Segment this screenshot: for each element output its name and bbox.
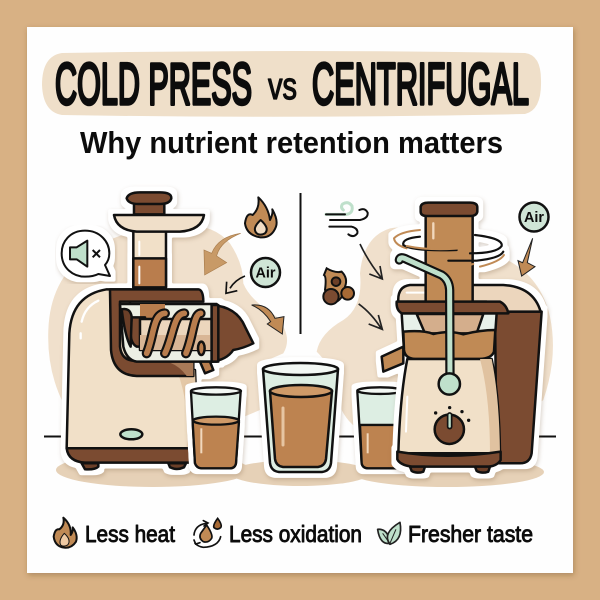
background blob: right [317, 228, 553, 433]
icon: fruit pieces [323, 268, 354, 304]
benefit: less oxidation: Less oxidation [229, 521, 362, 547]
collar [397, 302, 508, 313]
feed tube [426, 215, 473, 303]
outlet spout [200, 362, 213, 373]
speech bubble: quiet [62, 231, 110, 277]
motion swirl [394, 230, 504, 267]
icon: wind [326, 203, 368, 236]
thin arrows: right [359, 244, 382, 329]
dial [435, 415, 464, 444]
center divider [300, 193, 302, 334]
background blob: left [48, 225, 287, 437]
tube cap [421, 203, 477, 216]
cold press juicer [67, 192, 253, 469]
green lever [399, 258, 450, 377]
base [397, 452, 501, 467]
hood [398, 285, 541, 312]
icon: air badge right [520, 202, 548, 232]
icon: flame left [245, 197, 277, 237]
auger chamber [120, 304, 217, 362]
end cap [212, 305, 253, 362]
title banner: COLD PRESS [55, 52, 252, 117]
title banner: vs [268, 66, 297, 108]
icon: air badge right: Air [524, 209, 544, 226]
status light [120, 429, 142, 439]
small centrifugal glass [357, 387, 410, 468]
arrow: air to centrifugal [518, 238, 535, 276]
small cold press glass [191, 387, 241, 468]
body [67, 289, 196, 448]
basket [402, 313, 497, 359]
ground line [44, 436, 556, 438]
plunger tube [133, 230, 166, 287]
spout [382, 347, 403, 372]
body base [67, 448, 195, 463]
icon: flame [54, 518, 77, 548]
brown frame [110, 289, 203, 376]
top plate [114, 215, 204, 232]
icon: air badge left [251, 258, 280, 287]
benefit: fresher taste: Fresher taste [408, 521, 533, 547]
large center glass [263, 363, 338, 472]
body [398, 359, 500, 453]
arrow: air to juicer [226, 276, 245, 293]
icon: leaves [378, 522, 401, 544]
benefit: less heat [54, 518, 176, 548]
arrow: curved to glass [252, 305, 284, 334]
icon: drops and cycle [194, 518, 221, 547]
benefit: less oxidation [194, 518, 362, 547]
auger [131, 317, 145, 347]
rear housing [495, 312, 542, 463]
benefit: less heat: Less heat [85, 521, 176, 547]
ground shadows [56, 453, 544, 487]
centrifugal juicer [382, 203, 542, 473]
icon: air badge left: Air [256, 264, 276, 282]
subtitle: Why nutrient retention matters [80, 125, 503, 160]
arrow: heat to juicer [204, 233, 241, 275]
